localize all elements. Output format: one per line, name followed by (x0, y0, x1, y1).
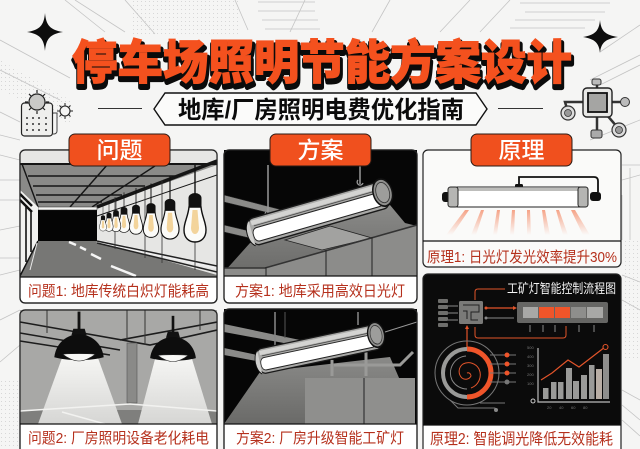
spiral dial gauge (435, 341, 516, 412)
panel: solution 1 (224, 150, 417, 303)
icon: calendar with suns (22, 90, 73, 136)
caption: 问题2: 厂房照明设备老化耗电 (28, 430, 209, 447)
bar and line chart: 500 (527, 345, 534, 350)
panel: solution 2 (224, 309, 417, 449)
illustration: underground garage with bulbs (20, 150, 217, 277)
bar and line chart: 20 (547, 405, 552, 410)
icon: chip network (561, 79, 630, 138)
panel: principle 2 (423, 274, 621, 449)
bar and line chart: 60 (571, 405, 576, 410)
tab: problem (69, 134, 170, 166)
illustration: efficient tube lamp (224, 150, 417, 276)
bar and line chart: 100 (527, 381, 534, 386)
illustration: old factory pendant lamps (20, 310, 217, 424)
subtitle ribbon (98, 93, 543, 125)
decorative star right (583, 20, 618, 53)
caption: 问题1: 地库传统白炽灯能耗高 (28, 283, 209, 300)
control flow diagram (438, 289, 608, 350)
panel: principle 1 (423, 150, 621, 267)
tab: solution (270, 134, 371, 166)
bar and line chart: 300 (527, 363, 534, 368)
title: 停车场照明节能方案设计 (73, 40, 573, 93)
panel: problem 2 (20, 310, 217, 449)
caption: 方案1: 地库采用高效日光灯 (235, 282, 405, 300)
tab: solution: 方案 (298, 137, 344, 163)
tab: principle: 原理 (498, 137, 544, 163)
illustration: smart high-bay tube lamp (224, 309, 417, 424)
decorative star left (27, 13, 63, 51)
bar and line chart: 80 (583, 405, 588, 410)
caption: 原理2: 智能调光降低无效能耗 (430, 430, 613, 448)
subtitle ribbon: 地库/厂房照明电费优化指南 (178, 97, 464, 124)
bar and line chart: 200 (527, 372, 534, 377)
panel: problem 1 (20, 150, 217, 303)
diagram heading: 工矿灯智能控制流程图 (507, 281, 616, 296)
bar and line chart: 400 (527, 354, 534, 359)
bar and line chart: 40 (559, 405, 564, 410)
caption: 方案2: 厂房升级智能工矿灯 (236, 429, 404, 447)
title: 停车场照明节能方案设计 (72, 36, 572, 89)
caption: 原理1: 日光灯发光效率提升30% (427, 249, 617, 266)
tab: problem: 问题 (96, 137, 142, 163)
tab: principle (471, 134, 572, 166)
illustration: tube with light rays (442, 177, 601, 235)
bar and line chart (527, 344, 610, 410)
